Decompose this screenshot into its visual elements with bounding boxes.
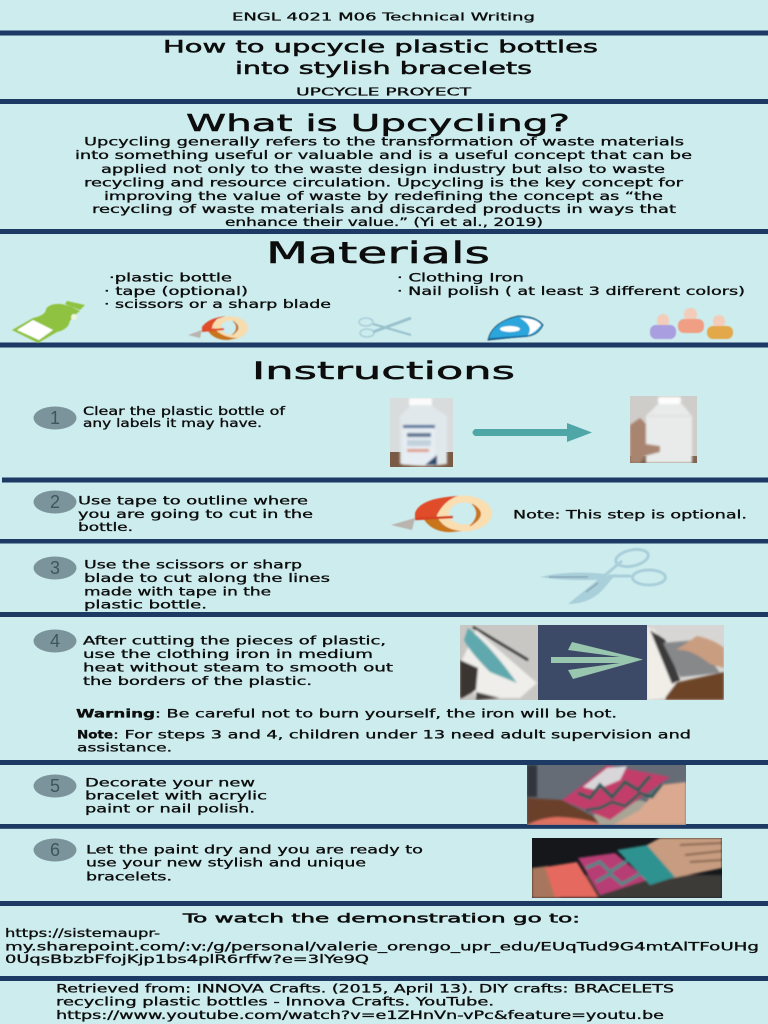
step 1 text: Clear the plastic bottle of — [83, 405, 286, 418]
step 1 text: any labels it may have. — [83, 417, 262, 430]
step 4 text: heat without steam to smooth out — [83, 662, 394, 674]
step 5 text: bracelet with acrylic — [85, 790, 267, 802]
course header: ENGL 4021 M06 Technical Writing — [232, 11, 535, 24]
note: adult supervision: : For steps 3 and 4, children under 13 need adult supervision and — [113, 728, 691, 742]
icon: nail polish — [650, 308, 733, 339]
photo: clean bottle — [630, 396, 697, 463]
step 6 badge — [34, 838, 76, 862]
photo: painted bracelet — [527, 765, 686, 825]
step 5 text: Decorate your new — [85, 776, 255, 790]
step 5 badge: 5 — [50, 776, 60, 796]
subtitle: UPCYCLE PROYECT — [296, 86, 472, 99]
step 2 — [34, 490, 747, 534]
step 6 text: Let the paint dry and you are ready to — [86, 844, 423, 856]
step 4 — [34, 625, 724, 754]
arrow — [472, 423, 592, 442]
citation: recycling plastic bottles - Innova Crafts. YouTube. — [56, 996, 494, 1008]
step 4 text: use the clothing iron in medium — [83, 648, 373, 661]
heading: what is upcycling: What is Upcycling? — [186, 109, 570, 137]
step 5 text — [85, 776, 267, 816]
text block: upcycling definition: recycling and resource circulation. Upcycling is the key concept for — [84, 176, 684, 190]
step 4 text — [83, 634, 394, 688]
text block: upcycling definition: enhance their value.” (Yi et al., 2019) — [225, 216, 543, 229]
note: optional: Note: This step is optional. — [513, 508, 747, 522]
photo: iron on plastic — [460, 625, 538, 700]
step 1 badge: 1 — [50, 408, 60, 428]
demonstration link — [5, 927, 759, 966]
photo: ironed plastic — [647, 625, 724, 700]
text block: upcycling definition: recycling of waste materials and discarded products in ways that — [92, 203, 677, 216]
step 3 text — [84, 558, 330, 612]
step 6 text: bracelets. — [86, 870, 172, 884]
icon: tape large — [391, 496, 492, 532]
step 6 — [34, 838, 722, 898]
step 6 text: use your new stylish and unique — [86, 856, 366, 870]
step 3 text: Use the scissors or sharp — [84, 558, 302, 572]
step 3 text: blade to cut along the lines — [84, 572, 330, 585]
heading: materials: Materials — [266, 236, 490, 270]
text block: upcycling definition: applied not only to the waste design industry but also to waste — [101, 163, 665, 176]
step 5 badge — [34, 774, 76, 798]
demonstration link: my.sharepoint.com/:v:/g/personal/valerie_orengo_upr_edu/EUqTud9G4mtAlTFoUHg — [5, 940, 759, 954]
step 1 badge — [34, 406, 76, 430]
note: adult supervision: Note — [77, 728, 113, 742]
step 2 badge: 2 — [50, 492, 60, 512]
step 3 badge: 3 — [50, 558, 60, 578]
step 4 text: After cutting the pieces of plastic, — [83, 634, 386, 648]
step 2 badge — [34, 490, 76, 514]
step 2 text — [78, 494, 313, 534]
materials list left: · tape (optional) — [104, 285, 248, 298]
icon: tape — [188, 316, 248, 340]
demonstration link: https://sistemaupr- — [5, 927, 160, 940]
warning — [76, 708, 617, 720]
photo: finished bracelets — [532, 838, 722, 898]
step 1 text — [83, 405, 286, 430]
text block: upcycling definition — [75, 136, 692, 229]
icon: scissors small — [359, 318, 411, 337]
citation: https://www.youtube.com/watch?v=e1ZHnVn-vPc&feature=youtu.be — [56, 1009, 664, 1022]
materials list right — [397, 272, 745, 298]
step 3 — [34, 547, 666, 612]
icon: scissors large — [540, 547, 666, 604]
text block: upcycling definition: into something useful or valuable and is a useful concept that can be — [75, 149, 692, 162]
warning: : Be careful not to burn yourself, the iron will be hot. — [155, 708, 617, 720]
step 4 text: the borders of the plastic. — [83, 675, 312, 688]
heading: demonstration: To watch the demonstration go to: — [181, 912, 580, 926]
step 6 badge: 6 — [50, 840, 60, 860]
step 2 text: Use tape to outline where — [78, 494, 308, 508]
photo: labelled bottle — [390, 398, 453, 467]
text block: upcycling definition: Upcycling generally refers to the transformation of waste materials — [84, 136, 684, 148]
step 4 badge: 4 — [50, 631, 60, 651]
main title: How to upcycle plastic bottles — [163, 38, 598, 57]
note: adult supervision: assistance. — [77, 742, 172, 754]
main title: into stylish bracelets — [235, 59, 532, 78]
step 1 — [34, 396, 697, 467]
main title — [163, 38, 598, 78]
step 3 badge — [34, 556, 76, 580]
step 5 text: paint or nail polish. — [85, 802, 255, 816]
citation: Retrieved from: INNOVA Crafts. (2015, April 13). DIY crafts: BRACELETS — [56, 982, 674, 996]
step 5 — [34, 765, 686, 825]
note: adult supervision — [77, 728, 691, 754]
citation — [56, 982, 674, 1022]
step 3 text: made with tape in the — [84, 586, 271, 598]
materials list left: · scissors or a sharp blade — [104, 298, 331, 311]
heading: instructions: Instructions — [252, 357, 515, 385]
materials list left — [104, 272, 331, 311]
text block: upcycling definition: improving the value of waste by redefining the concept as “the — [104, 190, 663, 203]
materials list right: · Clothing Iron — [397, 272, 524, 284]
step 6 text — [86, 844, 423, 884]
step 3 text: plastic bottle. — [84, 598, 207, 612]
materials list right: · Nail polish ( at least 3 different colors) — [397, 285, 745, 298]
icon: plastic bottle — [12, 301, 85, 343]
panel: arrow tile — [538, 625, 647, 700]
step 2 text: bottle. — [78, 521, 133, 534]
step 2 text: you are going to cut in the — [78, 508, 313, 521]
warning: Warning — [76, 708, 155, 720]
step 4 badge — [34, 630, 76, 652]
demonstration link: 0UqsBbzbFfojKjp1bs4plR6rffw?e=3lYe9Q — [5, 953, 369, 966]
icon: clothing iron — [488, 316, 543, 340]
materials list left: ·plastic bottle — [109, 272, 232, 284]
